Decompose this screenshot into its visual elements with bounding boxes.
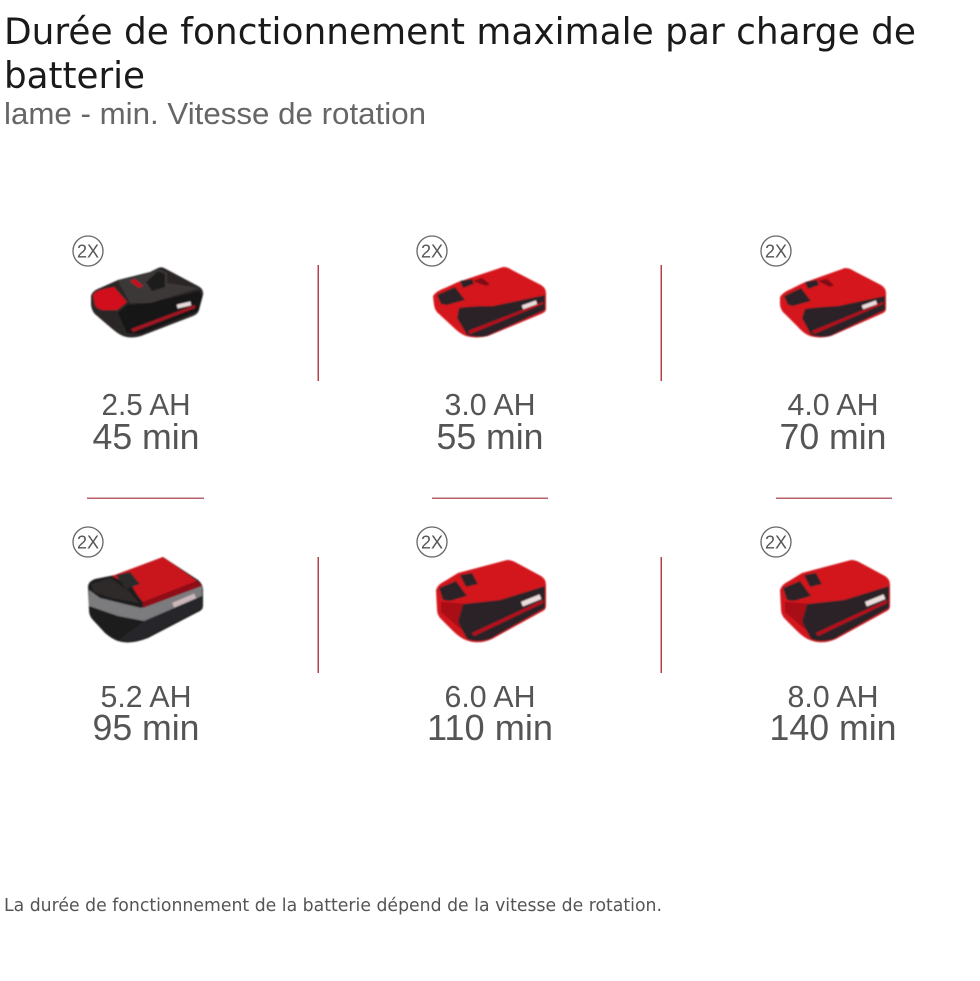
icon: black battery 2.5 AH [91,267,203,338]
label: 4.0 AH 70 min [780,387,886,457]
badge: 2X battery 6.0 AH [417,527,447,557]
label: 3.0 AH 55 min: 3.0 AH [444,387,536,422]
label: 8.0 AH 140 min: 8.0 AH [788,679,878,714]
badge: 2X battery 5.2 AH [73,527,103,557]
badge: 2X battery 8.0 AH: 2X [765,532,787,552]
label: 3.0 AH 55 min [436,387,544,457]
badge: 2X battery 6.0 AH: 2X [421,532,443,552]
title [4,10,916,97]
label: 5.2 AH 95 min: 95 min [92,707,200,748]
label: 4.0 AH 70 min: 70 min [780,416,886,457]
label: 2.5 AH 45 min: 2.5 AH [102,387,190,422]
title: Durée de fonctionnement maximale par charge de [4,10,916,53]
subtitle: lame - min. Vitesse de rotation [4,96,426,131]
icon: red battery 6.0 AH [436,560,546,642]
label: 8.0 AH 140 min [770,679,896,748]
icon: red battery 4.0 AH [780,268,886,338]
icon: red battery 8.0 AH [780,560,890,642]
label: 3.0 AH 55 min: 55 min [436,416,544,457]
label: 5.2 AH 95 min [92,679,200,748]
label: 6.0 AH 110 min: 6.0 AH [444,679,536,714]
label: 8.0 AH 140 min: 140 min [770,707,896,748]
badge: 2X battery 2.5 AH: 2X [77,242,99,262]
badge: 2X battery 4.0 AH: 2X [765,242,787,262]
label: 4.0 AH 70 min: 4.0 AH [788,387,878,422]
label: 6.0 AH 110 min: 110 min [427,707,553,748]
divider: middle horizontals [87,498,892,499]
label: 6.0 AH 110 min [427,679,553,748]
badge: 2X battery 5.2 AH: 2X [77,532,99,552]
badge: 2X battery 2.5 AH [73,236,103,266]
label: 2.5 AH 45 min [92,387,200,457]
icon: red battery 3.0 AH [433,267,546,338]
icon: black battery 5.2 AH [88,557,203,642]
badge: 2X battery 3.0 AH [417,236,447,266]
divider: top row verticals [318,265,662,381]
label: 5.2 AH 95 min: 5.2 AH [100,679,192,714]
title: batterie [4,54,145,97]
badge: 2X battery 3.0 AH: 2X [421,242,443,262]
badge: 2X battery 4.0 AH [761,236,791,266]
label: 2.5 AH 45 min: 45 min [92,416,200,457]
divider: bottom row verticals [318,557,662,673]
footnote: La durée de fonctionnement de la batterie dépend de la vitesse de rotation. [4,895,662,916]
badge: 2X battery 8.0 AH [761,527,791,557]
